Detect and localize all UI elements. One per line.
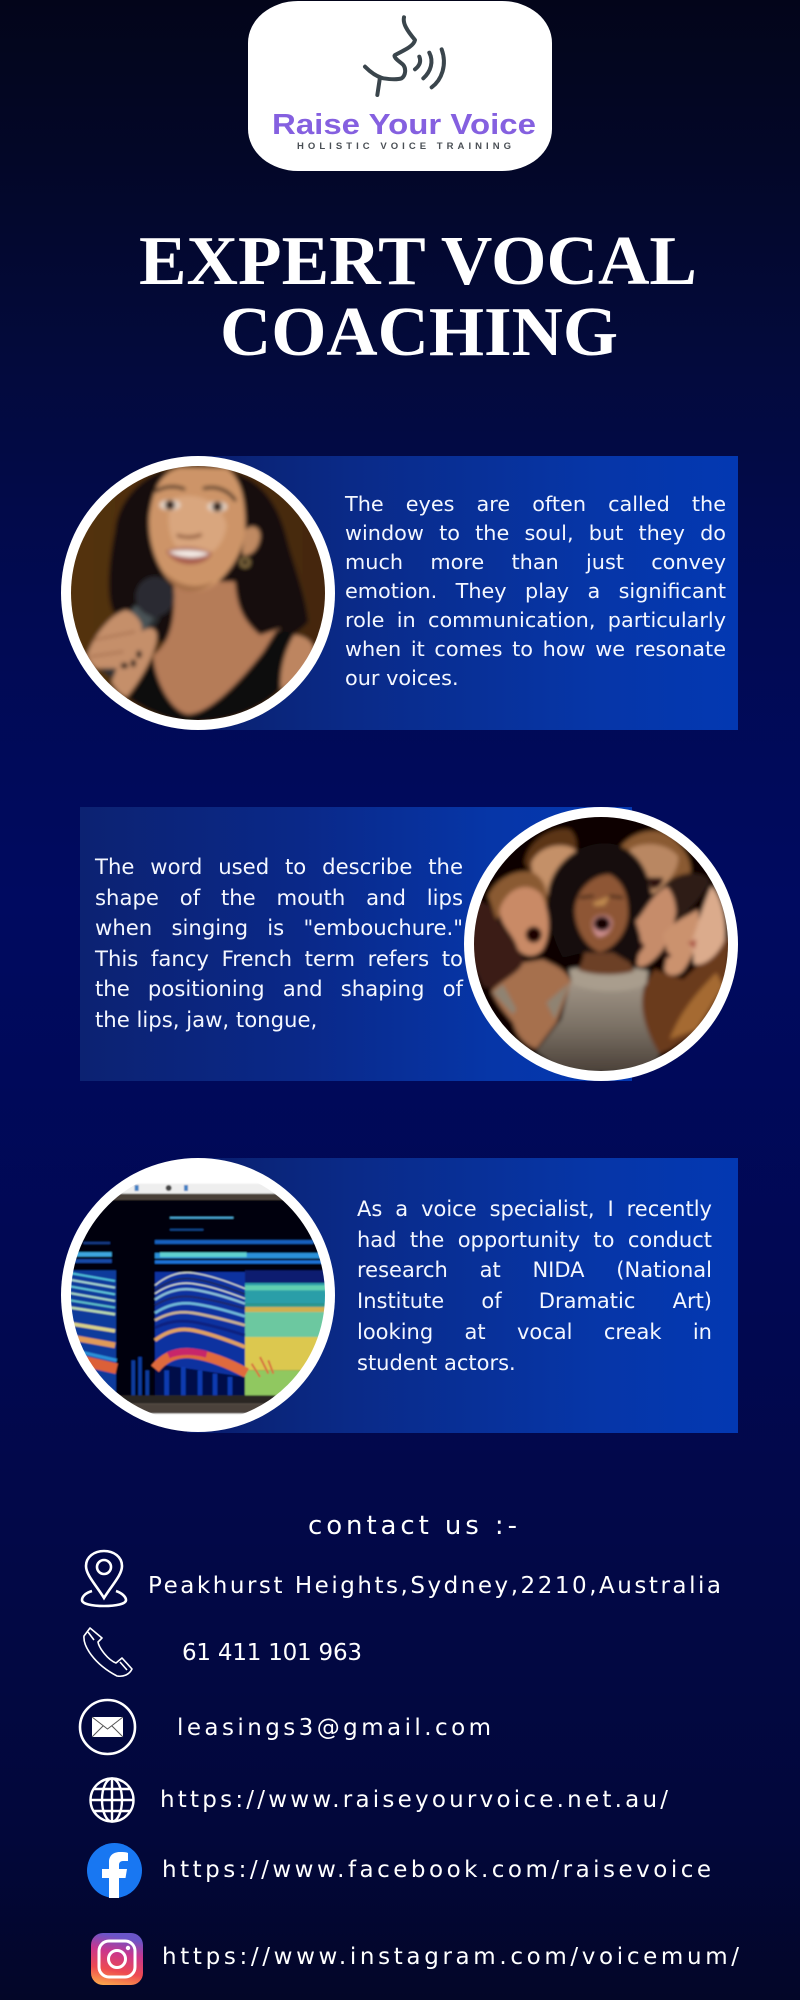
- ear: [242, 527, 260, 555]
- icon: instagram: [91, 1933, 143, 1985]
- text block: eyes and voice: window to the soul, but they do: [345, 521, 726, 545]
- right block: [245, 1270, 335, 1283]
- photo: spectrogram: [61, 1158, 335, 1432]
- brows: [157, 487, 235, 500]
- text block: embouchure: This fancy French term refers to: [95, 946, 463, 971]
- text block: eyes and voice: when it comes to how we resonate: [345, 637, 726, 661]
- left singer face: [500, 887, 549, 956]
- text block: embouchure: shape of the mouth and lips: [95, 885, 463, 910]
- facebook url: https://www.facebook.com/raisevoice: [162, 1857, 711, 1883]
- contact section: [78, 1511, 739, 1985]
- text block: eyes and voice: role in communication, particularly: [345, 608, 726, 632]
- centre singer shirt: [536, 983, 660, 1073]
- photo: woman singing into microphone: [61, 456, 335, 730]
- text block: embouchure: when singing is "embouchure.": [95, 915, 463, 940]
- right shoulder: [280, 635, 313, 690]
- panel: embouchure: [80, 807, 632, 1081]
- logo card: [248, 1, 552, 171]
- text block: NIDA research: student actors.: [357, 1351, 516, 1375]
- black top: [128, 630, 295, 722]
- far left dark haired singer: [470, 902, 525, 988]
- middle block: [154, 1270, 246, 1378]
- left block: [71, 1269, 118, 1393]
- text block: NIDA research: looking at vocal creak in: [357, 1320, 712, 1344]
- top formants: [170, 1215, 233, 1220]
- earring: [241, 558, 249, 567]
- icon: email: [80, 1700, 135, 1754]
- text block: eyes and voice: much more than just convey: [345, 550, 726, 574]
- left singer chest: [491, 959, 571, 1049]
- text block: embouchure: [94, 854, 464, 1032]
- text block: NIDA research: had the opportunity to conduct: [357, 1228, 712, 1252]
- neck and chest: [153, 582, 280, 718]
- text block: NIDA research: [357, 1197, 712, 1375]
- instagram url: https://www.instagram.com/voicemum/: [162, 1944, 739, 1970]
- panel: NIDA research: [187, 1158, 738, 1433]
- face: [149, 468, 245, 591]
- email address: leasings3@gmail.com: [177, 1715, 491, 1741]
- title: [139, 223, 697, 370]
- text block: eyes and voice: The eyes are often called the: [345, 492, 726, 516]
- photo: group of singers: [464, 807, 738, 1081]
- icon: speaking face with sound waves: [365, 17, 444, 95]
- right singer three: [690, 886, 725, 964]
- icon: facebook: [87, 1843, 142, 1898]
- centre face: [575, 874, 628, 952]
- tagline: HOLISTIC VOICE TRAINING: [297, 141, 511, 152]
- icon: phone handset: [84, 1628, 132, 1676]
- hand: [87, 610, 157, 697]
- text block: NIDA research: Institute of Dramatic Art): [357, 1289, 712, 1313]
- centre neck: [578, 943, 635, 975]
- contact heading: contact us :-: [308, 1511, 517, 1541]
- right singers hair: [635, 936, 730, 1054]
- right singer one: [636, 884, 677, 966]
- brand name: Raise Your Voice: [272, 109, 536, 141]
- top right singer: [620, 831, 691, 893]
- title: EXPERT VOCAL: [139, 223, 697, 300]
- text block: NIDA research: research at NIDA (National: [357, 1258, 712, 1282]
- text block: eyes and voice: [344, 492, 726, 690]
- title: COACHING: [220, 294, 618, 370]
- mouth: [166, 547, 212, 564]
- phone number: 61 411 101 963: [182, 1640, 362, 1666]
- text block: embouchure: The word used to describe the: [95, 854, 463, 879]
- right singer two: [663, 909, 699, 975]
- top left singer: [521, 825, 582, 872]
- text block: embouchure: the positioning and shaping of: [95, 976, 463, 1001]
- afro: [548, 843, 651, 963]
- right singer hair top: [665, 873, 710, 919]
- text block: embouchure: the lips, jaw, tongue,: [95, 1007, 317, 1032]
- text block: NIDA research: As a voice specialist, I recently: [357, 1197, 712, 1221]
- text block: eyes and voice: emotion. They play a significant: [345, 579, 726, 603]
- panel: eyes and voice resonance: [187, 456, 738, 730]
- hair: [109, 472, 308, 655]
- text block: eyes and voice: our voices.: [345, 666, 459, 690]
- nose: [177, 534, 202, 537]
- left singer hair: [488, 871, 547, 919]
- black column streaks: [133, 1357, 147, 1395]
- eyes: [159, 500, 181, 510]
- icon: location pin: [82, 1551, 126, 1606]
- icon: globe: [90, 1778, 134, 1822]
- address: Peakhurst Heights,Sydney,2210,Australia: [148, 1573, 721, 1599]
- microphone: [100, 616, 163, 679]
- website: https://www.raiseyourvoice.net.au/: [160, 1787, 668, 1813]
